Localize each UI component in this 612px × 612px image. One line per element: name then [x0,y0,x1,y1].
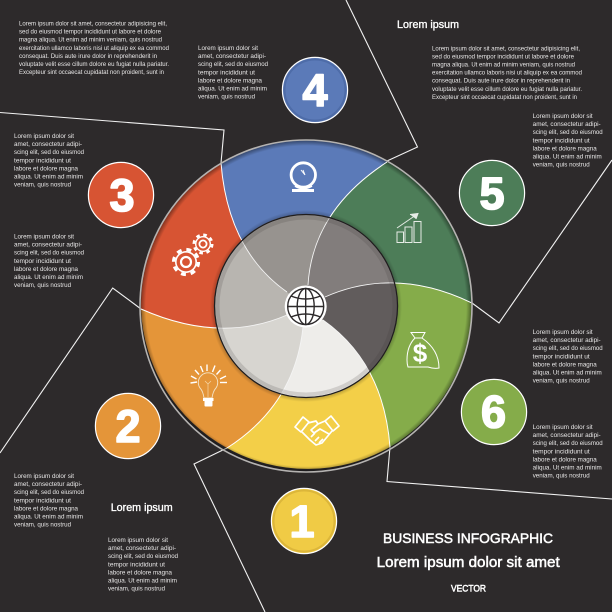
text block: below badge 6: amet, consectetur adipi- [533,432,601,439]
icon: globe [285,286,327,328]
text block: top right: Excepteur sint occaecat cupidatat non proident, sunt in [432,94,578,101]
text block: below badge 6: Lorem ipsum dolor sit [533,424,593,431]
segment: red [141,163,306,328]
text block: near badge 4: scing elit, sed do eiusmod [198,61,269,68]
text block: below badge 2: labore et dolore magna [14,505,79,512]
segment: yellow [227,306,390,469]
badge 3 [88,162,154,228]
icon: clock [291,163,315,192]
text block: top left: sed do eiusmod tempor incididunt ut labore et dolore [19,29,162,36]
text block: below badge 3: labore et dolore magna [14,266,79,273]
text block: above badge 3: Lorem ipsum dolor sit [14,133,74,140]
segment: dark green [306,162,472,306]
text block: above badge 5: scing elit, sed do eiusmod [533,129,603,136]
badge 4 [282,57,348,123]
text block: above badge 5: tempor incididunt ut [533,137,590,144]
text block: above badge 5: veniam, quis nostrud [533,162,590,169]
text block: near badge 4: aliqua. Ut enim ad minim [198,86,267,92]
text block: below badge 2 [14,473,85,529]
text block: above badge 3: veniam, quis nostrud [14,182,72,189]
badge 6 [461,379,527,445]
heading: bottom left: Lorem ipsum [111,502,173,514]
text block: near badge 4: veniam, quis nostrud [198,94,256,101]
text block: below badge 3: scing elit, sed do eiusmod [14,250,85,257]
badge 5 [459,160,525,226]
text block: bottom centre: tempor incididunt ut [108,561,165,568]
text block: top left: magna aliqua. Ut enim ad minim veniam, quis nostrud [19,37,163,44]
badge 6: 6 [481,386,506,438]
text block: bottom centre: veniam, quis nostrud [108,586,166,593]
badge 3: 3 [109,170,135,221]
text block: top right: consequat. Duis aute irure dolor in reprehenderit in [432,78,571,85]
icon: money bag [407,332,439,368]
text block: above badge 3 [14,133,85,189]
text block: near badge 4: Lorem ipsum dolor sit [198,45,258,52]
text block: bottom centre: labore et dolore magna [108,569,173,576]
text block: above badge 5 [533,113,603,169]
badge 1 [271,488,337,554]
text block: top right: Lorem ipsum dolor sit amet, consectetur adipisicing elit, [432,45,580,52]
text block: top right [432,45,583,101]
segment: light green [306,283,472,447]
text block: above badge 6: aliqua. Ut enim ad minim [533,370,602,376]
icon: light bulb [190,364,227,406]
text block: above badge 6 [533,329,603,385]
title block [377,530,560,594]
text block: below badge 3 [14,234,85,289]
badge 4: 4 [302,65,328,116]
segment: blue [221,140,387,306]
text block: above badge 6: tempor incididunt ut [533,353,590,360]
text block: near badge 4: labore et dolore magna [198,77,263,84]
text block: below badge 2: veniam, quis nostrud [14,522,72,529]
text block: bottom centre: Lorem ipsum dolor sit [108,537,168,544]
text block: top left [19,20,170,76]
text block: above badge 6: amet, consectetur adipi- [533,337,601,344]
text block: top left: Excepteur sint occaecat cupidatat non proident, sunt in [19,69,165,76]
segment: orange [141,306,306,448]
text block: above badge 5: amet, consectetur adipi- [533,121,601,128]
text block: below badge 3: tempor incididunt ut [14,258,71,265]
text block: below badge 6: aliqua. Ut enim ad minim [533,464,602,472]
badge 2 [95,393,161,459]
icon: money bag: $ [413,338,428,368]
text block: above badge 3: aliqua. Ut enim ad minim [14,174,83,180]
icon: handshake [295,416,339,445]
text block: below badge 6: scing elit, sed do eiusmod [533,440,603,447]
text block: below badge 6: tempor incididunt ut [533,448,590,455]
text block: below badge 3: Lorem ipsum dolor sit [14,234,74,240]
inner grey wheel [214,214,398,398]
text block: below badge 3: aliqua. Ut enim ad minim [14,274,83,281]
text block: below badge 2: scing elit, sed do eiusmod [14,489,85,496]
icon: chart [397,214,421,242]
text block: bottom centre: aliqua. Ut enim ad minim [108,578,177,584]
text block: above badge 6: labore et dolore magna [533,361,597,368]
text block: above badge 3: scing elit, sed do eiusmod [14,149,85,156]
text block: top right: sed do eiusmod tempor incididunt ut labore et dolore [432,53,575,60]
text block: top right: exercitation ullamco laboris nisi ut aliquip ex ea commod [432,70,583,77]
text block: below badge 3: veniam, quis nostrud [14,282,72,289]
text block: below badge 2: Lorem ipsum dolor sit [14,473,74,480]
badge 1: 1 [289,496,315,547]
text block: above badge 5: aliqua. Ut enim ad minim [533,154,602,160]
outer ring [140,140,472,472]
donut chart [140,140,472,472]
text block: top left: exercitation ullamco laboris nisi ut aliquip ex ea commod [19,45,170,52]
text block: below badge 6: veniam, quis nostrud [533,473,590,480]
text block: above badge 5: Lorem ipsum dolor sit [533,113,593,120]
text block: near badge 4 [198,45,269,101]
text block: above badge 3: amet, consectetur adipi- [14,141,82,148]
text block: below badge 2: amet, consectetur adipi- [14,481,82,488]
text block: top right: voluptate velit esse cillum dolore eu fugiat nulla pariatur. [432,86,582,93]
text block: above badge 6: scing elit, sed do eiusmod [533,345,603,352]
title block: VECTOR [451,584,486,594]
text block: above badge 3: tempor incididunt ut [14,157,71,164]
text block: below badge 6 [533,424,603,480]
text block: near badge 4: tempor incididunt ut [198,69,255,76]
text block: bottom centre: amet, consectetur adipi- [108,545,176,552]
text block: below badge 2: aliqua. Ut enim ad minim [14,514,83,520]
text block: top left: voluptate velit esse cillum dolore eu fugiat nulla pariatur. [19,61,169,68]
text block: top left: consequat. Duis aute irure dolor in reprehenderit in [19,53,158,60]
text block: near badge 4: amet, consectetur adipi- [198,53,266,60]
text block: below badge 3: amet, consectetur adipi- [14,242,82,249]
badge 2: 2 [115,401,141,452]
text block: above badge 6: Lorem ipsum dolor sit [533,329,593,336]
text block: bottom centre: scing elit, sed do eiusmod [108,553,179,560]
icon: gears [174,235,212,274]
text block: below badge 2: tempor incididunt ut [14,497,71,504]
text block: above badge 5: labore et dolore magna [533,145,597,152]
text block: above badge 3: labore et dolore magna [14,165,79,172]
title block: BUSINESS INFOGRAPHIC [383,530,553,546]
text block: bottom centre [108,537,179,593]
text block: above badge 6: veniam, quis nostrud [533,378,590,385]
text block: below badge 6: labore et dolore magna [533,456,597,463]
text block: top right: magna aliqua. Ut enim ad minim veniam, quis nostrud [432,62,576,68]
text block: top left: Lorem ipsum dolor sit amet, consectetur adipisicing elit, [19,20,167,28]
title block: Lorem ipsum dolor sit amet [377,555,560,571]
badge 5: 5 [479,168,505,219]
heading: top right: Lorem ipsum [397,19,459,31]
